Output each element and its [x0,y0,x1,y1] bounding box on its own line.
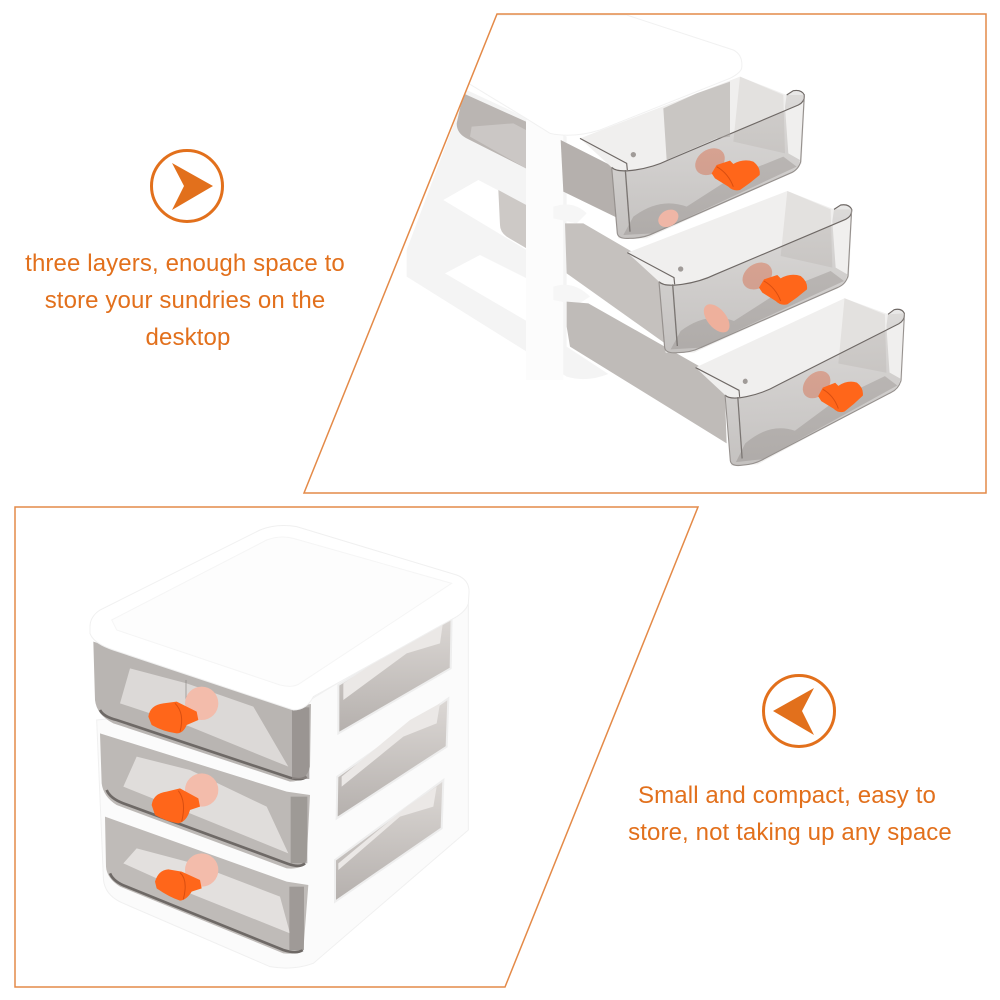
panel frame: top right [304,14,986,493]
drawer 2 side panel [565,223,664,342]
drawer front 1 [93,642,311,782]
drawer 1 [580,77,805,239]
text: three layers description: desktop [146,324,230,351]
drawer 1 interior shading [663,82,730,160]
panel frame: bottom left [15,507,698,987]
text: three layers description [25,250,345,351]
text: small and compact description [628,782,952,846]
product photo: closed organizer [90,526,469,968]
icon: left-pointing arrow in circle [764,676,834,746]
drawer 2 [627,191,852,353]
side window: middle [337,698,448,818]
lid [90,526,469,710]
text: small and compact description: Small and compact, easy to [638,782,936,809]
text: three layers description: three layers, enough space to [25,250,345,277]
icon: right-pointing arrow in circle [152,150,222,222]
side window: top [338,615,452,733]
drawer 3 side panel [567,302,738,443]
product photo: organizer with drawers pulled out [407,15,905,468]
drawer front 2 [100,733,310,869]
text: small and compact description: store, not taking up any space [628,819,952,846]
drawer 2 ghost strap [704,304,730,332]
drawer front 3 [105,817,308,954]
drawer 3 [696,295,905,468]
text: three layers description: store your sundries on the [45,287,325,314]
lid [468,15,742,135]
side window: bottom [335,780,443,902]
drawer 1 ghost strap [658,210,678,228]
